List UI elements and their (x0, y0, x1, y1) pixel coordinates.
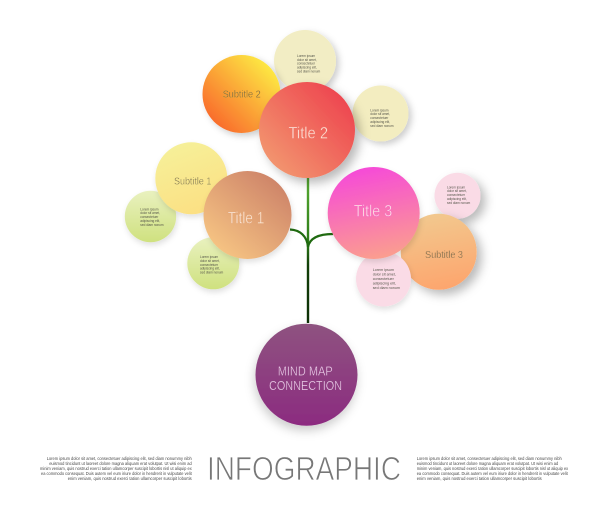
title 1 bubble: Title 1 (228, 210, 264, 228)
root bubble: mind map connection: MIND MAP (278, 365, 333, 379)
right paragraph: ea commodo consequat. Duis autem vel eum iriure dolor in hendrerit in vulputate velit (417, 471, 568, 477)
text bubble: bottom: consectetuer (373, 277, 395, 281)
text bubble: bottom: sed diam nonum (373, 286, 400, 290)
text bubble: top right: consectetuer (447, 193, 465, 197)
text bubble: left: consectetuer (140, 215, 158, 219)
text bubble: bottom: sed diam nonum (200, 271, 224, 275)
text bubble: left: Lorem ipsum (140, 207, 159, 211)
left paragraph (40, 456, 192, 482)
right paragraph: euismod tincidunt ut laoreet dolore magna aliquam erat volutpat. Ut wisi enim ad (417, 461, 558, 467)
subtitle 1 bubble: Subtitle 1 (174, 177, 211, 188)
left paragraph: enim veniam, quis nostrud exerci tation ullamcorper suscipit lobortis (68, 476, 192, 482)
text bubble: bottom: Lorem ipsum (373, 268, 394, 272)
text bubble: left: adipiscing elit, (140, 219, 160, 223)
text bubble: top: consectetuer (297, 62, 315, 66)
text bubble: bottom (356, 252, 411, 306)
title 2 bubble: Title 2 (288, 124, 328, 142)
text bubble: bottom: consectetuer (200, 263, 218, 267)
right paragraph (417, 456, 569, 482)
title 3 bubble (328, 167, 420, 259)
main heading: INFOGRAPHIC (207, 450, 401, 487)
subtitle 3 bubble (401, 214, 477, 290)
connector: tree stem and branches (290, 178, 333, 323)
text bubble: top right: adipiscing elit, (447, 197, 467, 201)
text bubble: left: dolor sit amet, (140, 211, 160, 215)
title 1 bubble (204, 171, 292, 259)
text bubble: left (125, 191, 176, 242)
text bubble: right: dolor sit amet, (370, 112, 390, 116)
text bubble: right: consectetuer (370, 116, 388, 120)
title 3 bubble: Title 3 (354, 202, 392, 220)
right paragraph: Lorem ipsum dolor sit amet, consectetuer adipiscing elit, sed diam nonummy nibh (417, 456, 562, 462)
text bubble: bottom: Lorem ipsum (200, 255, 219, 259)
text bubble: bottom: dolor sit amet, (200, 259, 220, 263)
branch: title 3 cluster (328, 167, 480, 306)
text bubble: top: Lorem ipsum (297, 54, 316, 58)
text bubble: bottom: dolor sit amet, (373, 272, 396, 276)
left paragraph: minim veniam, quis nostrud exerci tation ullamcorper suscipit lobortis nisl ut aliquip ex (40, 466, 192, 472)
right paragraph: enim veniam, quis nostrud exerci tation ullamcorper suscipit lobortis (417, 476, 542, 482)
text bubble: bottom (187, 237, 239, 289)
left paragraph: euismod tincidunt ut laoreet dolore magna aliquam erat volutpat. Ut wisi enim ad (49, 461, 192, 467)
branch: title 1 cluster (125, 142, 292, 289)
text bubble: left: sed diam nonum (140, 223, 164, 227)
text bubble: right: sed diam nonum (370, 124, 394, 128)
text bubble: top (274, 30, 336, 92)
text bubble: right: adipiscing elit, (370, 120, 390, 124)
subtitle 2 bubble: Subtitle 2 (223, 89, 261, 100)
text bubble: top right: sed diam nonum (447, 201, 471, 205)
text bubble: right: Lorem ipsum (370, 108, 389, 112)
subtitle 3 bubble: Subtitle 3 (425, 250, 464, 261)
text bubble: right (352, 86, 408, 142)
text bubble: bottom: adipiscing elit, (373, 281, 396, 285)
title 2 bubble (259, 82, 355, 178)
subtitle 2 bubble (202, 55, 280, 133)
text bubble: top right: dolor sit amet, (447, 189, 467, 193)
text bubble: bottom: adipiscing elit, (200, 267, 220, 271)
left paragraph: ea commodo consequat. Duis autem vel eum iriure dolor in hendrerit in vulputate velit (41, 471, 192, 477)
right paragraph: minim veniam, quis nostrud exerci tation ullamcorper suscipit lobortis nisl ut aliquip ex (417, 466, 569, 472)
text bubble: top right (434, 173, 480, 219)
text bubble: top: adipiscing elit, (297, 66, 317, 70)
text bubble: top right: Lorem ipsum (447, 185, 466, 189)
root bubble: mind map connection (256, 324, 358, 426)
text bubble: top: sed diam nonum (297, 70, 321, 74)
text bubble: top: dolor sit amet, (297, 58, 317, 62)
root bubble: mind map connection: CONNECTION (269, 379, 342, 393)
branch: title 2 cluster (202, 30, 408, 178)
left paragraph: Lorem ipsum dolor sit amet, consectetuer adipiscing elit, sed diam nonummy nibh (47, 456, 192, 462)
subtitle 1 bubble (155, 142, 227, 214)
